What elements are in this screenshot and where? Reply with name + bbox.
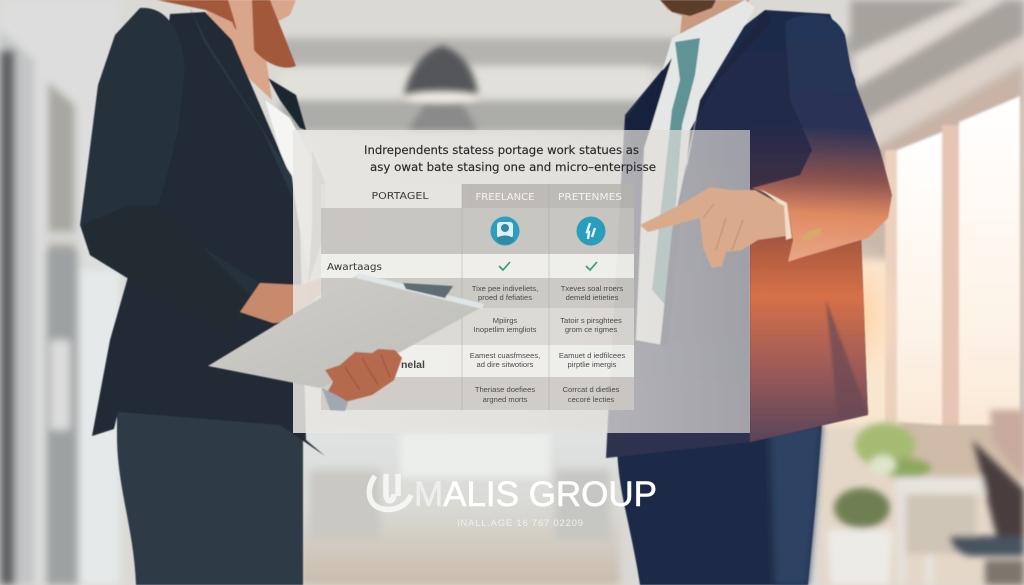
table body text: Txeves soal rroers [561, 284, 623, 293]
woman [80, 0, 343, 585]
cuff buttons [803, 228, 821, 242]
lapel [190, 8, 296, 205]
shirt cuff [760, 189, 792, 240]
table body text: Eamest cuasfmsees, [470, 351, 540, 360]
table body text: pirptlie imergis [568, 360, 617, 369]
windows [885, 96, 1020, 425]
check marks [499, 262, 597, 270]
neck and beard [660, 0, 750, 38]
pendant lamps [404, 46, 479, 130]
panel heading [364, 143, 656, 174]
sleeve [752, 14, 892, 262]
woman's left hand [240, 278, 343, 323]
table body text: Inopetlim iemgliots [474, 325, 537, 334]
company contact line: INALL.AGE 16 767 02209 [457, 518, 584, 529]
sleeve [80, 8, 260, 337]
column headers [372, 191, 622, 203]
hand holding clipboard [322, 349, 402, 411]
brand logo [369, 474, 657, 529]
table body text: Corrcat d dietlies [563, 385, 620, 394]
floor [300, 430, 620, 585]
panel: translucent comparison [293, 130, 750, 433]
table body text: proed d fefiaties [478, 293, 532, 302]
table body text: argned morts [483, 395, 528, 404]
shirt [636, 0, 755, 345]
neck and face [205, 0, 296, 100]
comparison table [321, 184, 634, 410]
column headers: FREELANCE [476, 192, 534, 203]
trousers [117, 410, 303, 585]
ceiling [280, 0, 870, 40]
company name: MALIS GROUP [414, 475, 657, 514]
row label: nelal: nelal [401, 359, 425, 371]
jacket [606, 10, 868, 458]
table body text: Mpiirgs [493, 316, 517, 325]
man's sleeve and pointing hand [640, 14, 892, 268]
table body text: Theriase doefiees [475, 385, 535, 394]
jacket body [92, 12, 325, 456]
trousers [617, 424, 822, 585]
panel heading: Indrependents statess portage work statues as [364, 143, 639, 157]
table body text: Tixe pee indiveliets, [472, 284, 538, 293]
table body text: cecoré lecties [568, 395, 614, 404]
shirt [265, 100, 322, 280]
icon: pretenmes tools [576, 216, 606, 246]
table body text: Eamuet d iedfilcees [559, 351, 625, 360]
table body text: Tatoir s pirsghtees [560, 316, 622, 325]
row label: Awartaage: Awartaags [327, 262, 382, 273]
pointing hand [640, 187, 786, 268]
table body text [470, 284, 625, 404]
lapel [660, 10, 772, 345]
table body text: ad dire sitwotiors [477, 360, 534, 369]
column headers: PRETENMES [558, 192, 622, 203]
orange light flare [818, 240, 902, 390]
plant, table and chair [827, 410, 1024, 585]
orange lit jacket side [750, 120, 868, 442]
table body text: demeld ietieties [566, 293, 619, 302]
man [606, 0, 868, 585]
logo mark [369, 474, 411, 509]
hair [157, 0, 296, 68]
panel heading: asy owat bate stasing one and micro–enterpisse [370, 160, 656, 174]
tie [652, 38, 700, 308]
icon: freelance person [490, 216, 520, 246]
right wall and beams [850, 0, 1024, 585]
clipboard [208, 273, 484, 388]
clipboard and woman's hand [208, 273, 484, 411]
left wall and shelving [0, 0, 120, 585]
table body text: grom ce rigmes [565, 325, 617, 334]
column headers: PORTAGEL [372, 191, 429, 202]
